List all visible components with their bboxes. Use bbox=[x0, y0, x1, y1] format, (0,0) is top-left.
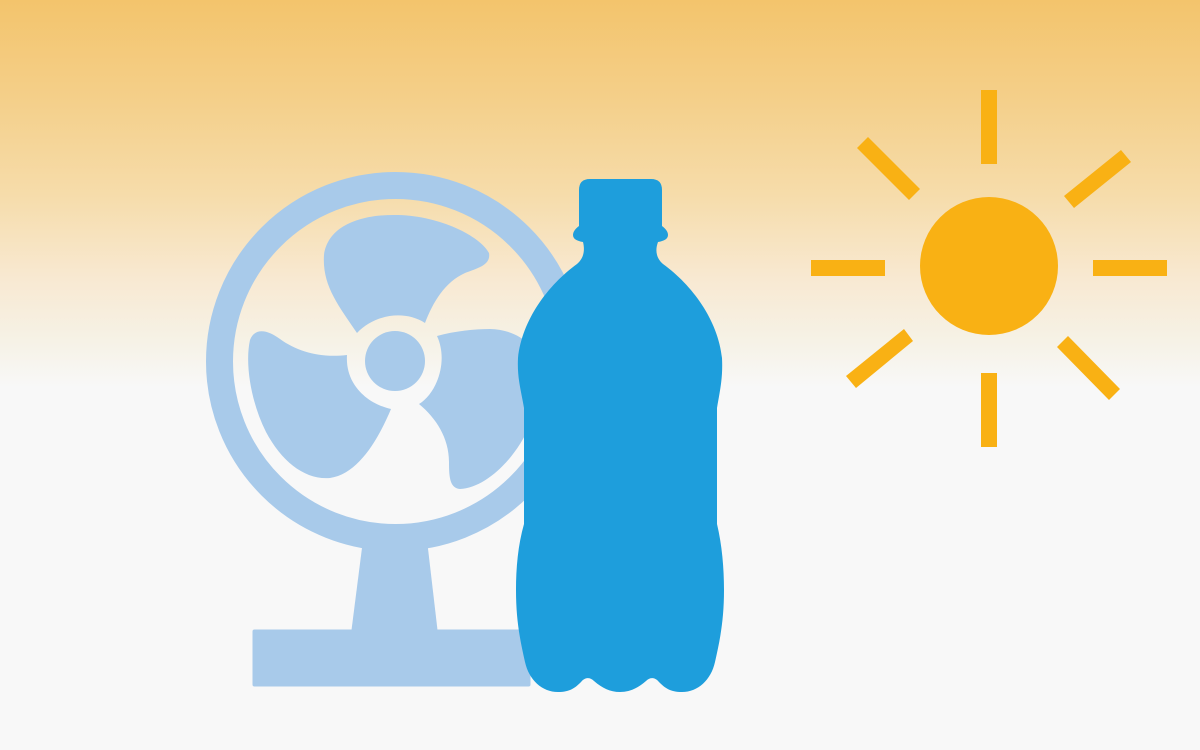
fan blade top bbox=[324, 215, 489, 333]
sun rays bbox=[811, 90, 1167, 447]
background sky gradient bbox=[0, 0, 1200, 388]
fan stem bbox=[352, 540, 438, 630]
fan cage ring bbox=[220, 186, 572, 538]
fan hub bbox=[365, 331, 425, 391]
icon: water bottle bbox=[516, 179, 724, 692]
icon: fan bbox=[220, 186, 572, 686]
fan blade left bbox=[248, 331, 391, 478]
fan blade right bbox=[419, 329, 530, 489]
fan base bbox=[252, 630, 530, 686]
icon: sun bbox=[811, 90, 1167, 447]
sun disc bbox=[920, 197, 1058, 335]
